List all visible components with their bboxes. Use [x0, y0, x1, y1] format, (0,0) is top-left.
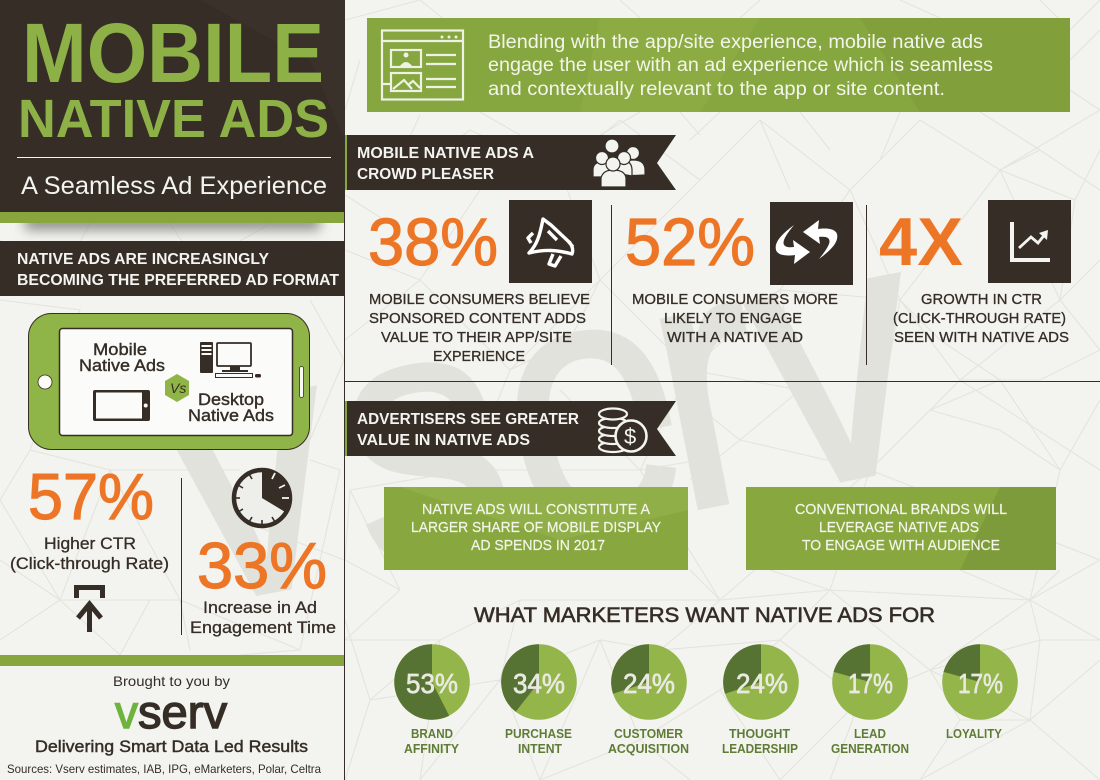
heading band: preferred ad format: BECOMING THE PREFERRED AD FORMAT — [17, 272, 339, 289]
callout: conventional brands: CONVENTIONAL BRANDS WILL — [795, 502, 1007, 518]
pie chart: thought leadership: THOUGHT — [729, 726, 790, 741]
stat: 52% — [625, 202, 853, 346]
pie chart: loyality: 17% — [958, 668, 1003, 699]
stat: 4x — [879, 200, 1071, 346]
shadow under title panel — [25, 214, 320, 230]
pie chart: brand affinity: BRAND — [411, 726, 453, 741]
heading: what marketers want: WHAT MARKETERS WANT NATIVE ADS FOR — [474, 604, 935, 627]
pie chart: loyality: LOYALITY — [946, 726, 1002, 741]
stat: 4x: (CLICK-THROUGH RATE) — [893, 310, 1066, 327]
heading band: preferred ad format — [0, 241, 344, 296]
pie chart: purchase intent: INTENT — [518, 741, 562, 756]
title: native ads: NATIVE ADS — [18, 89, 329, 149]
icon: web page layout — [382, 30, 463, 100]
pie chart: lead generation: LEAD — [854, 726, 886, 741]
icon: versus badge — [165, 374, 189, 402]
pie chart: purchase intent: 34% — [513, 668, 565, 699]
icon: coins: $ — [624, 424, 636, 449]
ribbon: greater value: VALUE IN NATIVE ADS — [357, 432, 530, 449]
icon: crowd — [593, 139, 645, 187]
phone comparison graphic — [28, 314, 310, 450]
intro panel — [367, 18, 1070, 112]
callout: share of spends — [384, 487, 688, 570]
callout: share of spends: AD SPENDS IN 2017 — [471, 538, 605, 554]
stat: 52%: MOBILE CONSUMERS MORE — [632, 291, 838, 308]
stat: 33% engagement time: 33% — [197, 529, 327, 602]
stat: 38%: VALUE TO THEIR APP/SITE — [381, 329, 572, 346]
pie chart: customer acquisition — [608, 644, 689, 756]
stat: 57% higher ctr — [10, 460, 169, 632]
intro text — [488, 32, 993, 100]
intro text: and contextually relevant to the app or site content. — [488, 79, 945, 100]
pie chart: thought leadership: LEADERSHIP — [722, 741, 798, 756]
icon: desktop computer — [200, 342, 261, 378]
heading band: preferred ad format: NATIVE ADS ARE INCREASINGLY — [17, 251, 269, 268]
label: mobile native ads — [79, 340, 165, 375]
footer: sponsor credits: Sources: Vserv estimates, IAB, IPG, eMarketers, Polar, Celtra — [7, 762, 321, 776]
pie chart: lead generation — [831, 644, 909, 756]
ribbon: crowd pleaser: MOBILE NATIVE ADS A — [357, 145, 534, 162]
label: mobile native ads: Mobile — [93, 340, 147, 359]
stat: 52%: LIKELY TO ENGAGE — [664, 310, 802, 327]
stat: 52%: 52% — [625, 205, 755, 280]
stat: 4x: GROWTH IN CTR — [921, 291, 1042, 308]
title: mobile: MOBILE — [22, 6, 324, 100]
vserv logo: v — [115, 686, 138, 738]
stat: 33% engagement time: Increase in Ad — [203, 598, 317, 617]
footer: sponsor credits — [7, 673, 321, 776]
icon: growth chart — [988, 200, 1071, 283]
callout: conventional brands — [746, 487, 1056, 570]
icon: coins — [599, 408, 646, 452]
stat: 38%: 38% — [368, 205, 498, 280]
footer band — [0, 655, 344, 666]
footer: sponsor credits: Brought to you by — [113, 673, 230, 689]
stat: 57% higher ctr: 57% — [28, 460, 154, 533]
stat: 38%: EXPERIENCE — [433, 348, 525, 365]
stat: 57% higher ctr: (Click-through Rate) — [10, 554, 169, 573]
left column divider — [344, 0, 345, 780]
label: desktop native ads: Native Ads — [188, 406, 274, 425]
callout: share of spends: NATIVE ADS WILL CONSTITUTE A — [422, 502, 650, 518]
pie chart: customer acquisition: ACQUISITION — [608, 741, 689, 756]
stat: 38%: SPONSORED CONTENT ADDS — [369, 310, 586, 327]
stat: 4x: 4X — [879, 204, 963, 280]
icon: clock — [234, 470, 290, 526]
icon: megaphone — [509, 200, 592, 283]
stat: 4x: SEEN WITH NATIVE ADS — [894, 329, 1069, 346]
ribbon: crowd pleaser — [345, 135, 676, 190]
stat: 33% engagement time: Engagement Time — [190, 618, 336, 637]
footer: sponsor credits: Delivering Smart Data Led Results — [35, 737, 308, 756]
label: mobile native ads: Native Ads — [79, 356, 165, 375]
pie chart: purchase intent — [501, 644, 577, 756]
pie chart: brand affinity — [394, 644, 470, 756]
vserv logo: serv — [138, 686, 227, 738]
icon: versus badge: Vs — [170, 380, 186, 396]
pie chart: customer acquisition: 24% — [623, 668, 675, 699]
watermark: vserv: vserv — [135, 142, 950, 680]
stat: 52%: WITH A NATIVE AD — [667, 329, 803, 346]
pie chart: purchase intent: PURCHASE — [505, 726, 572, 741]
pie chart: thought leadership: 24% — [736, 668, 788, 699]
pie chart: loyality — [942, 644, 1018, 741]
icon: tablet — [93, 390, 150, 421]
intro text: engage the user with an ad experience which is seamless — [488, 55, 993, 76]
pie chart: brand affinity: 53% — [406, 668, 458, 699]
stat: 57% higher ctr: Higher CTR — [44, 534, 136, 553]
ribbon: crowd pleaser: CROWD PLEASER — [357, 166, 494, 183]
pie chart: lead generation: GENERATION — [831, 741, 909, 756]
label: desktop native ads — [188, 390, 274, 425]
stat: 38%: MOBILE CONSUMERS BELIEVE — [369, 291, 590, 308]
ribbon: greater value: ADVERTISERS SEE GREATER — [357, 411, 579, 428]
icon: sync arrows — [770, 202, 853, 285]
pie chart: customer acquisition: CUSTOMER — [614, 726, 684, 741]
icon: up arrow — [76, 588, 102, 632]
callout: conventional brands: LEVERAGE NATIVE ADS — [819, 520, 979, 536]
stat: 33% engagement time — [190, 470, 336, 637]
subtitle: A Seamless Ad Experience — [21, 172, 327, 200]
intro text: Blending with the app/site experience, mobile native ads — [488, 32, 983, 53]
pie chart: lead generation: 17% — [848, 668, 893, 699]
label: desktop native ads: Desktop — [198, 390, 264, 409]
pie chart: brand affinity: AFFINITY — [404, 741, 459, 756]
title panel — [0, 0, 345, 223]
callout: share of spends: LARGER SHARE OF MOBILE DISPLAY — [411, 520, 661, 536]
ribbon: greater value — [345, 401, 676, 456]
stat: 38% — [368, 200, 592, 365]
pie chart: thought leadership — [722, 644, 799, 756]
callout: conventional brands: TO ENGAGE WITH AUDIENCE — [802, 538, 1000, 554]
